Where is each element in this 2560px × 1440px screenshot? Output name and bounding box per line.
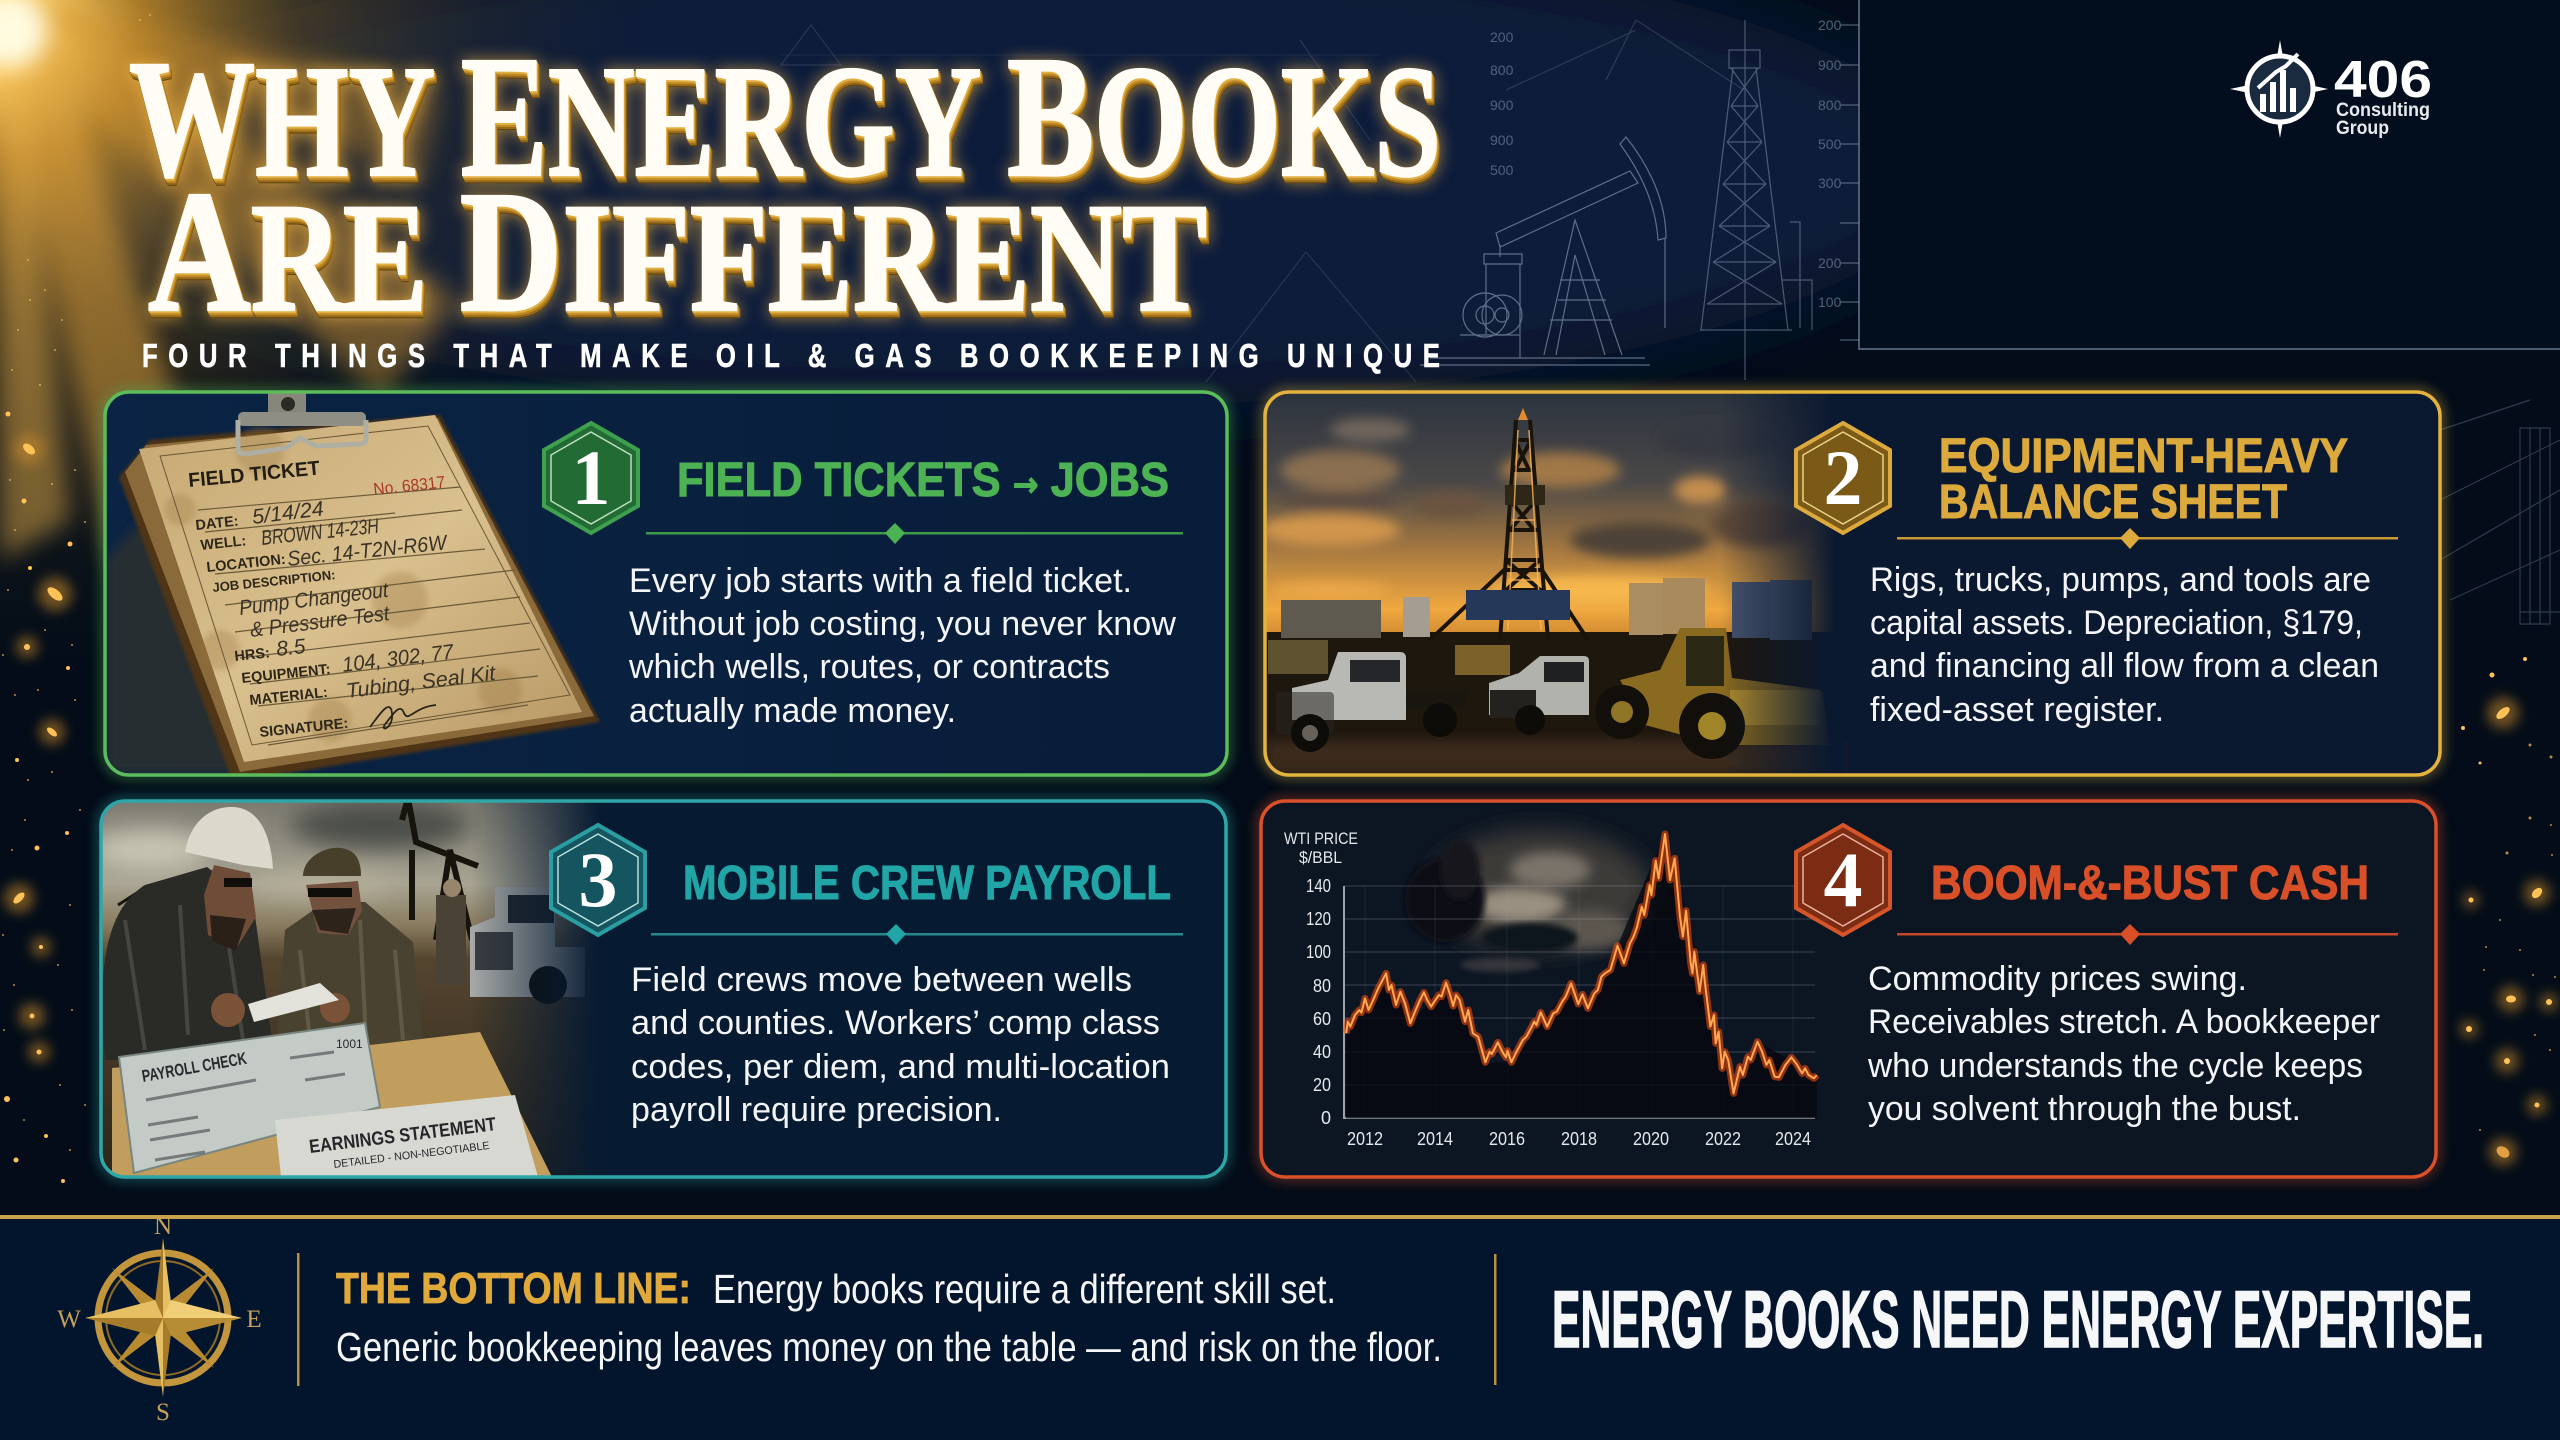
blueprint: pump jack xyxy=(1420,137,1666,365)
bottom-line text: Generic bookkeeping leaves money on the table — and risk on the floor. xyxy=(336,1324,1442,1370)
payroll check xyxy=(119,1023,380,1173)
blueprint frame and scale: 500 xyxy=(1818,136,1842,152)
x axis labels: 2014 xyxy=(1417,1129,1453,1149)
heading 4: BOOM-&-BUST CASH xyxy=(1931,857,2369,910)
title: WHY ENERGY BOOKS xyxy=(129,20,1441,213)
ticket text: FIELD TICKET xyxy=(187,457,321,492)
body text 2: capital assets. Depreciation, §179, xyxy=(1870,604,2363,642)
blueprint: faint triangles xyxy=(780,25,1416,382)
badge 3: 3 xyxy=(578,836,618,923)
ticket text: Pump Changeout xyxy=(238,579,391,620)
payroll check: 1001 xyxy=(336,1037,363,1051)
hands and paper xyxy=(211,983,350,1027)
body text 2: Rigs, trucks, pumps, and tools are xyxy=(1870,561,2371,599)
right ember field xyxy=(2460,657,2558,1166)
ticket text: 104, 302, 77 xyxy=(341,640,456,677)
blueprint frame and scale: 100 xyxy=(1818,294,1842,310)
body text 3: codes, per diem, and multi-location xyxy=(631,1048,1170,1086)
x axis labels: 2012 xyxy=(1347,1129,1383,1149)
body text 3 xyxy=(631,961,1170,1129)
logo: 406 Consulting Group: Group xyxy=(2336,118,2389,139)
blueprint frame and scale: 200 xyxy=(1818,255,1842,271)
worker: ball cap xyxy=(277,848,424,1047)
body text 1 xyxy=(628,562,1176,730)
ticket text: JOB DESCRIPTION: xyxy=(212,567,336,595)
badge 2 xyxy=(1796,423,1890,533)
earnings statement xyxy=(275,1095,538,1177)
body text 1: Without job costing, you never know xyxy=(629,605,1176,643)
body text 1: which wells, routes, or contracts xyxy=(628,648,1110,686)
y axis labels: 80 xyxy=(1313,976,1331,996)
ticket text xyxy=(187,457,498,741)
body text 4: Commodity prices swing. xyxy=(1868,960,2247,998)
logo: 406 Consulting Group: 406 xyxy=(2334,51,2432,109)
chart grid xyxy=(1344,886,1815,1085)
ticket text: BROWN 14-23H xyxy=(260,515,381,550)
left ember field xyxy=(2,14,151,1183)
body text 4: who understands the cycle keeps xyxy=(1867,1047,2363,1085)
blueprint frame and scale: 800 xyxy=(1818,97,1842,113)
loader xyxy=(1595,628,1830,759)
storage tanks xyxy=(1281,578,1812,640)
badge 3 xyxy=(551,825,645,935)
ticket text: SIGNATURE: xyxy=(259,716,349,741)
ticket text: Tubing, Seal Kit xyxy=(345,662,498,703)
x axis labels: 2024 xyxy=(1775,1129,1811,1149)
ticket text: & Pressure Test xyxy=(249,602,392,642)
y axis labels: 120 xyxy=(1306,909,1331,929)
chart under-curve shadow xyxy=(1346,834,1817,1118)
divider 4 xyxy=(1897,924,2398,945)
ticket text: 8.5 xyxy=(275,635,307,661)
blueprint frame and scale: 200 xyxy=(1490,29,1514,45)
trucks xyxy=(1268,640,1589,752)
x axis labels: 2020 xyxy=(1633,1129,1669,1149)
panel 1: field tickets xyxy=(105,392,1227,782)
divider 3 xyxy=(651,924,1183,945)
blueprint frame and scale: 200 xyxy=(1818,17,1842,33)
panel 3: mobile crew payroll xyxy=(90,798,1226,1177)
ticket text: Sec. 14-T2N-R6W xyxy=(286,531,450,571)
truck xyxy=(470,887,585,1004)
chart: WTI price xyxy=(1284,829,1817,1149)
blueprint frame and scale xyxy=(1490,0,2560,349)
panel 4: boom-and-bust cash xyxy=(1261,801,2436,1177)
x axis labels xyxy=(1347,1129,1811,1149)
heading 1: FIELD TICKETS → JOBS xyxy=(677,454,1169,507)
icon: compass rose: E xyxy=(246,1306,262,1333)
body text 4: Receivables stretch. A bookkeeper xyxy=(1868,1003,2380,1041)
body text 4 xyxy=(1867,960,2380,1128)
blueprint: oil derrick xyxy=(1506,20,1812,380)
bottom-line text: Energy books require a different skill set. xyxy=(713,1266,1336,1312)
subtitle: FOUR THINGS THAT MAKE OIL & GAS BOOKKEEPING UNIQUE xyxy=(142,338,1440,375)
pump jacks xyxy=(118,798,478,940)
badge 4: 4 xyxy=(1824,836,1862,923)
logo: compass mark xyxy=(2230,40,2328,138)
ticket text: 5/14/24 xyxy=(251,497,325,529)
y axis labels: 100 xyxy=(1306,942,1331,962)
sunburst glow xyxy=(0,0,660,660)
ticket text: HRS: xyxy=(234,645,271,665)
x axis labels: 2022 xyxy=(1705,1129,1741,1149)
illustration: rig and equipment at sunset xyxy=(1260,392,1840,775)
worker: hard hat xyxy=(102,807,275,1061)
heading 2 xyxy=(1939,430,2348,529)
body text 1: Every job starts with a field ticket. xyxy=(629,562,1132,600)
panel 2: equipment-heavy balance sheet xyxy=(1260,392,2440,775)
heading 2: EQUIPMENT-HEAVY xyxy=(1939,430,2348,483)
bottom-line text: THE BOTTOM LINE: xyxy=(336,1264,691,1313)
body text 3: Field crews move between wells xyxy=(631,961,1132,999)
payroll check: PAYROLL CHECK xyxy=(140,1049,249,1086)
icon: compass rose: S xyxy=(156,1399,170,1426)
blueprint frame and scale: 900 xyxy=(1490,97,1514,113)
divider 2 xyxy=(1897,528,2398,549)
ticket text: LOCATION: xyxy=(206,552,286,576)
body text 2 xyxy=(1870,561,2379,729)
envelope xyxy=(112,1032,552,1177)
illustration: clipboard with field ticket xyxy=(119,393,600,782)
bottom-line text xyxy=(297,1253,1496,1386)
title xyxy=(129,20,1441,348)
badge 1 xyxy=(544,423,638,533)
x axis labels: 2018 xyxy=(1561,1129,1597,1149)
illustration: crew reviewing payroll xyxy=(90,798,610,1177)
badge 4 xyxy=(1796,825,1890,935)
price line xyxy=(1346,834,1817,1093)
blueprint frame and scale: 800 xyxy=(1490,62,1514,78)
heading 3: MOBILE CREW PAYROLL xyxy=(683,857,1171,910)
ticket text: MATERIAL: xyxy=(249,685,329,709)
ticket text: WELL: xyxy=(200,533,247,554)
ticket text: No. 68317 xyxy=(372,473,446,499)
chart axis title: WTI PRICE xyxy=(1284,829,1358,848)
divider 1 xyxy=(646,523,1183,544)
body text 2: and financing all flow from a clean xyxy=(1870,647,2379,685)
badge 1: 1 xyxy=(572,434,610,521)
ticket text: DATE: xyxy=(195,514,239,534)
bottom band xyxy=(0,1215,2560,1440)
blueprint frame and scale: 900 xyxy=(1490,132,1514,148)
chart axis title: $/BBL xyxy=(1299,848,1342,867)
blueprint frame and scale: 900 xyxy=(1818,57,1842,73)
y axis labels: 140 xyxy=(1306,876,1331,896)
body text 4: you solvent through the bust. xyxy=(1868,1090,2301,1128)
heading 2: BALANCE SHEET xyxy=(1939,476,2287,529)
blueprint frame and scale: 500 xyxy=(1490,162,1514,178)
x axis labels: 2016 xyxy=(1489,1129,1525,1149)
title: ARE DIFFERENT xyxy=(148,155,1207,348)
body text 3: payroll require precision. xyxy=(631,1091,1002,1129)
blueprint frame and scale: 300 xyxy=(1818,175,1842,191)
icon: compass rose: N xyxy=(154,1213,172,1240)
logo: 406 Consulting Group: Consulting xyxy=(2336,100,2430,121)
y axis labels: 40 xyxy=(1313,1042,1331,1062)
y axis labels: 20 xyxy=(1313,1075,1331,1095)
earnings statement: DETAILED - NON-NEGOTIABLE xyxy=(333,1140,490,1171)
ticket text: EQUIPMENT: xyxy=(241,662,331,687)
earnings statement: EARNINGS STATEMENT xyxy=(308,1114,498,1158)
icon: compass rose: W xyxy=(57,1306,81,1333)
storm clouds xyxy=(1405,830,1650,972)
body text 3: and counties. Workers’ comp class xyxy=(631,1004,1160,1042)
derrick xyxy=(1430,420,1588,640)
metal clip xyxy=(238,393,366,454)
blueprint: lower-right structure xyxy=(2440,400,2560,624)
chart axis title xyxy=(1284,829,1358,867)
y axis labels: 60 xyxy=(1313,1009,1331,1029)
body text 1: actually made money. xyxy=(629,692,956,730)
badge 2: 2 xyxy=(1824,434,1862,521)
body text 2: fixed-asset register. xyxy=(1870,691,2164,729)
icon: compass rose xyxy=(57,1213,262,1426)
y axis labels: 0 xyxy=(1321,1108,1331,1128)
y axis labels xyxy=(1306,876,1331,1128)
logo: 406 Consulting Group xyxy=(2230,40,2432,139)
